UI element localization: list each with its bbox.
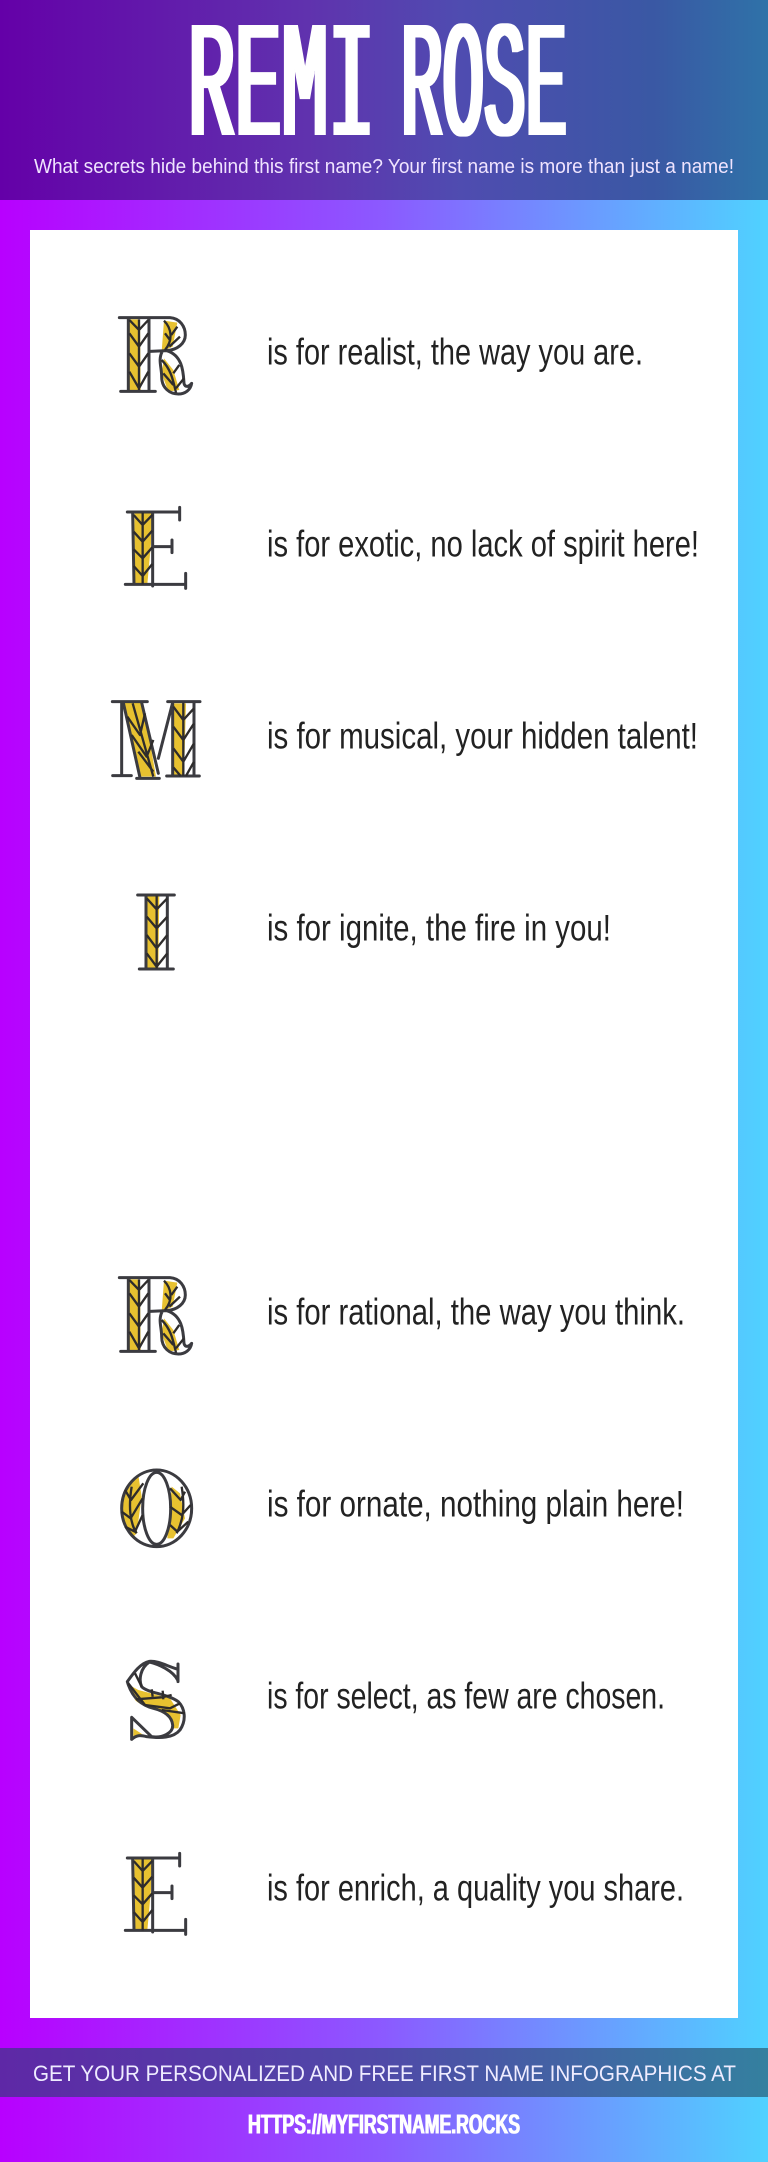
subtitle: What secrets hide behind this first name? Your first name is more than just a name! [34,155,734,178]
text: R row: is for realist, the way you are. [267,332,643,372]
icon: letter I [138,895,174,969]
text: I row: is for ignite, the fire in you! [267,908,611,948]
icon: letter E [125,507,186,588]
footer band [0,2048,768,2097]
header band [0,0,768,200]
icon: letter S [127,1661,185,1739]
icon: letter R second [119,1278,192,1354]
footer link: HTTPS://MYFIRSTNAME.ROCKS [248,2108,520,2140]
footer text: GET YOUR PERSONALIZED AND FREE FIRST NAME INFOGRAPHICS AT [33,2061,736,2086]
title: REMI [188,0,375,186]
panel: letters [30,230,738,2018]
icon: letter O [122,1470,192,1547]
icon: letter E second [125,1853,186,1934]
icon: letter M [112,702,200,778]
icon: letter R [119,318,192,394]
